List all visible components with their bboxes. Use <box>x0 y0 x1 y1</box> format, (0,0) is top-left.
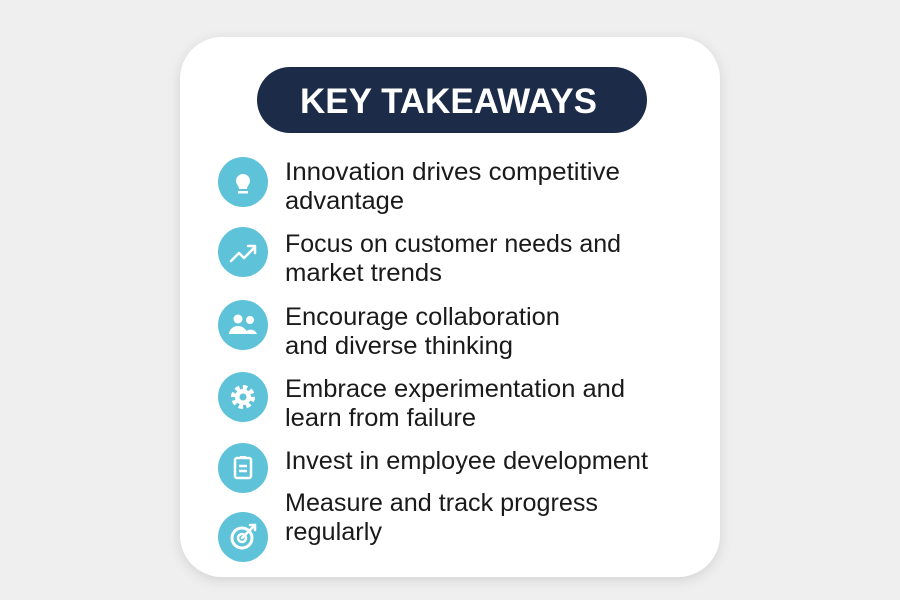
text: Encourage collaboration <box>285 303 560 331</box>
icon: people <box>218 300 268 350</box>
text <box>285 230 621 287</box>
item 6: measure progress <box>218 489 598 562</box>
text <box>285 158 620 215</box>
icon: trend arrow <box>218 227 268 277</box>
title pill <box>257 67 647 133</box>
item 4: experimentation <box>218 372 625 432</box>
item 2: customer <box>218 227 621 287</box>
item 5: employee development <box>218 443 648 493</box>
item 3: collaboration <box>218 300 560 360</box>
icon: clipboard <box>218 443 268 493</box>
icon: target <box>218 512 268 562</box>
text: regularly <box>285 518 383 546</box>
text <box>285 489 598 546</box>
icon: gear <box>218 372 268 422</box>
panel: key takeaways card <box>180 37 720 577</box>
text: Focus on customer needs and <box>285 230 621 258</box>
title pill: KEY TAKEAWAYS <box>300 82 597 121</box>
text: Innovation drives competitive <box>285 158 620 186</box>
text: market trends <box>285 259 442 287</box>
item 1: innovation <box>218 157 620 215</box>
text: learn from failure <box>285 404 476 432</box>
text: advantage <box>285 187 404 215</box>
text: Measure and track progress <box>285 489 598 517</box>
icon: light bulb <box>218 157 268 207</box>
text: Embrace experimentation and <box>285 375 625 403</box>
text <box>285 303 560 360</box>
text: and diverse thinking <box>285 332 513 360</box>
text <box>285 375 625 432</box>
text: Invest in employee development <box>285 447 648 475</box>
